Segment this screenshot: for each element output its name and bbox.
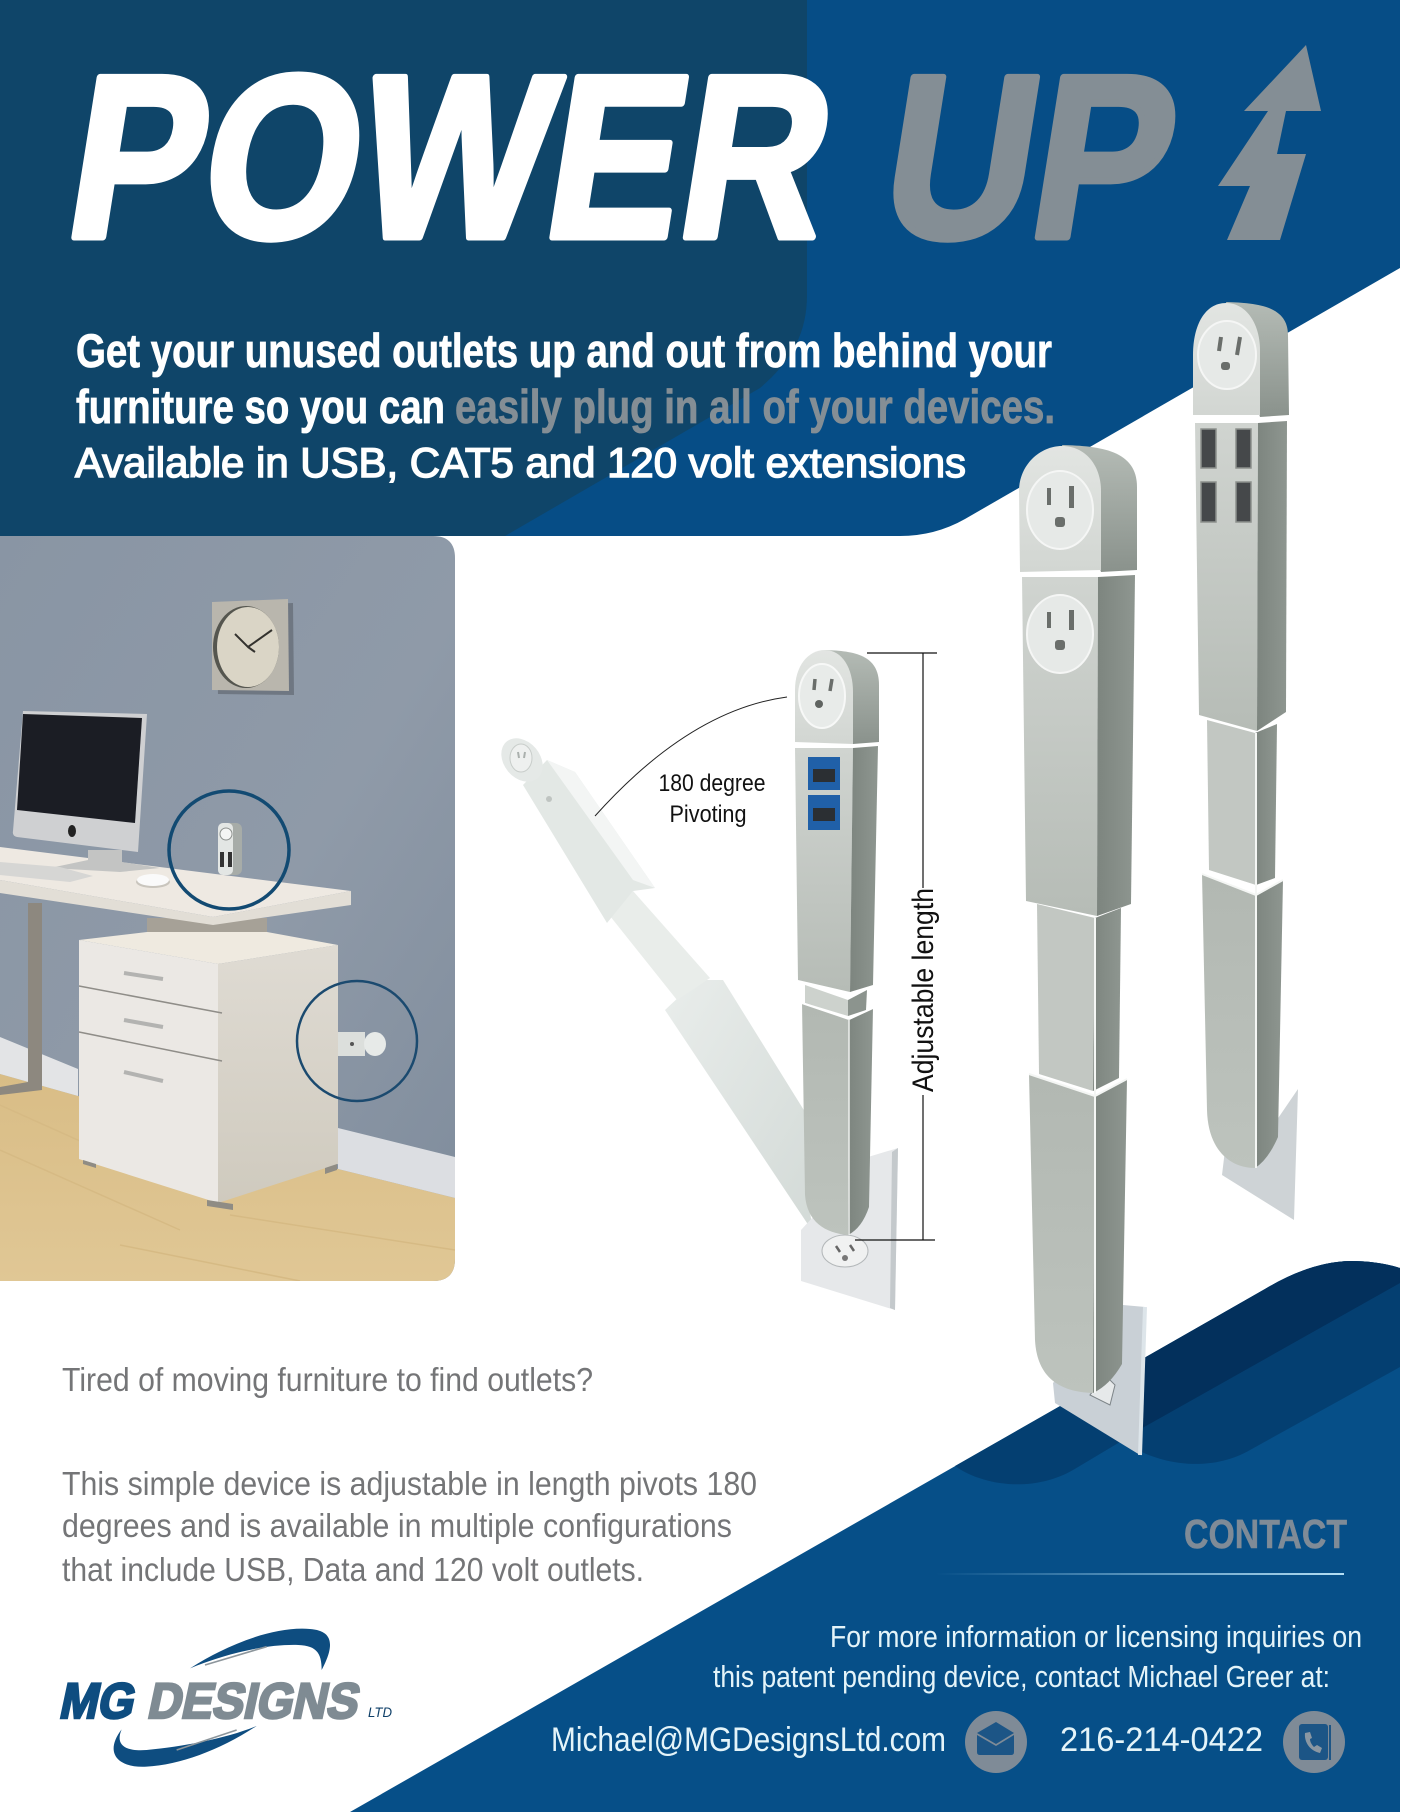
- contact intro text: [713, 1619, 1362, 1694]
- outlet: [1198, 321, 1256, 389]
- body text: description: This simple device is adjustable in length pivots 180: [62, 1465, 757, 1502]
- device body: [795, 650, 879, 1235]
- wall plate: [1053, 1305, 1145, 1455]
- label: 180 degree pivoting: Pivoting: [670, 801, 746, 828]
- contact divider: [936, 1573, 1344, 1575]
- product: double outlet device: [1019, 445, 1145, 1455]
- device on desk: [218, 823, 242, 875]
- icon: envelope: [965, 1711, 1027, 1773]
- title: POWER: POWER: [53, 28, 850, 287]
- desk top: [0, 847, 351, 925]
- label: 180 degree pivoting: [658, 770, 766, 828]
- keyboard and mouse: [0, 862, 170, 888]
- body text: description: that include USB, Data and 120 volt outlets.: [62, 1551, 644, 1588]
- title: UP: UP: [868, 28, 1194, 287]
- subheading text: [75, 324, 1055, 486]
- icon: lightning arrow: [1218, 45, 1321, 240]
- label: 180 degree pivoting: 180 degree: [658, 770, 766, 797]
- logo: MG Designs: [56, 1629, 392, 1767]
- monitor: [13, 711, 160, 872]
- product: pivoting device with CAT5: [493, 650, 940, 1310]
- body text: question: Tired of moving furniture to find outlets?: [62, 1361, 593, 1398]
- USB ports: [1201, 429, 1251, 522]
- device on wall: [338, 1032, 386, 1056]
- clock: [212, 599, 294, 695]
- icon: phone book: [1283, 1711, 1345, 1773]
- desk leg: [0, 903, 42, 1095]
- body text: description: degrees and is available in multiple configurations: [62, 1507, 732, 1544]
- dimension line: [855, 653, 937, 1240]
- contact heading: CONTACT: [1184, 1511, 1347, 1557]
- header background: blue panel: [0, 0, 1400, 536]
- body text: description: [62, 1465, 757, 1588]
- subheading text: easily plug in all of your devices.: [455, 380, 1055, 433]
- footer background: blue wave: [350, 1261, 1400, 1812]
- outlet: [799, 664, 845, 728]
- photo: desk scene: [0, 536, 455, 1281]
- logo: MG Designs: MG: [56, 1673, 142, 1729]
- product: USB device: [1193, 302, 1298, 1220]
- subheading text: furniture so you can: [76, 380, 445, 433]
- outlet: upper: [1027, 471, 1093, 549]
- highlight circle: desk: [169, 791, 289, 909]
- label: adjustable length: Adjustable length: [907, 888, 940, 1092]
- wall plate: [1222, 1089, 1298, 1220]
- wall plate: [801, 1148, 898, 1310]
- contact phone: 216-214-0422: [1060, 1721, 1263, 1759]
- subheading text: Available in USB, CAT5 and 120 volt extensions: [75, 439, 966, 486]
- header background: dark panel: [0, 0, 807, 536]
- contact intro text: this patent pending device, contact Michael Greer at:: [713, 1659, 1330, 1694]
- logo: MG Designs: DESIGNS: [144, 1673, 366, 1729]
- pivot arc: [595, 697, 787, 816]
- contact email: Michael@MGDesignsLtd.com: [551, 1721, 946, 1759]
- CAT5 ports: [808, 757, 840, 830]
- pivoted arm: [493, 730, 813, 1232]
- highlight circle: wall: [297, 981, 417, 1101]
- outlet: lower: [1027, 595, 1093, 673]
- subheading text: Get your unused outlets up and out from behind your: [76, 324, 1052, 377]
- cabinet: [79, 918, 338, 1210]
- logo: MG Designs: LTD: [368, 1704, 392, 1720]
